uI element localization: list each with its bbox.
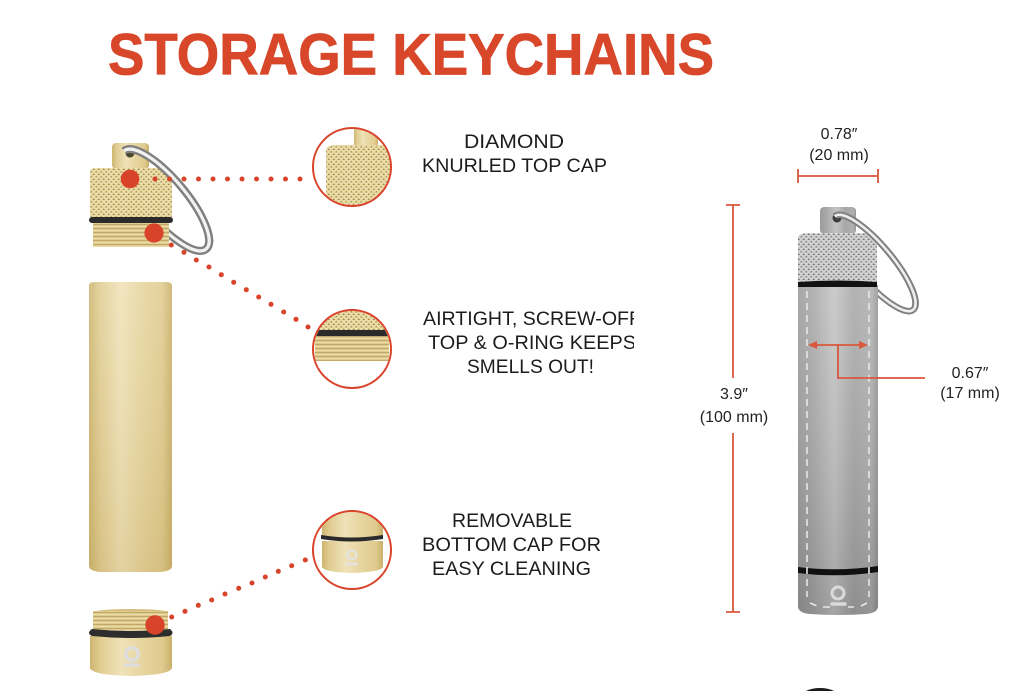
dashed inner outline (807, 291, 869, 607)
gold body tube (89, 282, 172, 572)
logo mark (125, 648, 138, 665)
cropped dark object at bottom edge (802, 688, 838, 691)
label: airtight screw-off top: TOP & O-RING KEEPS (428, 332, 636, 354)
silver ring front arc (832, 212, 919, 312)
label: removable bottom cap: REMOVABLE (452, 510, 572, 532)
gold bottom cap (89, 609, 172, 676)
gold ring back arc (108, 137, 222, 263)
dimension: outer diameter (798, 126, 878, 183)
label: diamond knurled top cap (422, 131, 607, 177)
detail circle: threads and O-ring (313, 310, 391, 388)
detail circle: bottom cap (313, 510, 391, 589)
silver keychain (798, 205, 927, 615)
dotted leader: screw-off top (169, 242, 310, 330)
label: removable bottom cap (422, 510, 601, 580)
silver logo mark (832, 587, 845, 604)
detail circle: knurled cap (313, 125, 392, 206)
label: airtight screw-off top: AIRTIGHT, SCREW-OFF (423, 308, 641, 330)
label: airtight screw-off top: SMELLS OUT! (467, 356, 594, 378)
gold top cap (89, 143, 173, 247)
label: diamond knurled top cap: DIAMOND (464, 131, 564, 153)
silver O-rings (798, 280, 878, 575)
dimension: outer diameter: 0.78″ (821, 126, 858, 143)
dimension: inner diameter: (17 mm) (940, 385, 1000, 402)
silver ring back arc (821, 205, 927, 321)
red marker dots (121, 170, 165, 635)
label: removable bottom cap: EASY CLEANING (432, 558, 591, 580)
label: airtight screw-off top (423, 312, 634, 373)
dimension: height: (100 mm) (700, 409, 768, 426)
dimension: inner diameter: 0.67″ (952, 365, 989, 382)
dimension: inner diameter (808, 341, 1000, 402)
dotted leader: top cap (152, 176, 302, 182)
label: diamond knurled top cap: KNURLED TOP CAP (422, 155, 607, 177)
dotted leader: bottom cap (169, 558, 308, 620)
silver body (798, 285, 878, 615)
title: STORAGE KEYCHAINS (108, 22, 714, 88)
gold keychain exploded view (89, 137, 222, 676)
dimension: height (700, 205, 768, 612)
label: removable bottom cap: BOTTOM CAP FOR (422, 534, 601, 556)
dimension: height: 3.9″ (720, 386, 748, 403)
silver stem and cap (798, 207, 877, 282)
dimension: outer diameter: (20 mm) (809, 147, 869, 164)
gold ring front arc (122, 145, 214, 252)
